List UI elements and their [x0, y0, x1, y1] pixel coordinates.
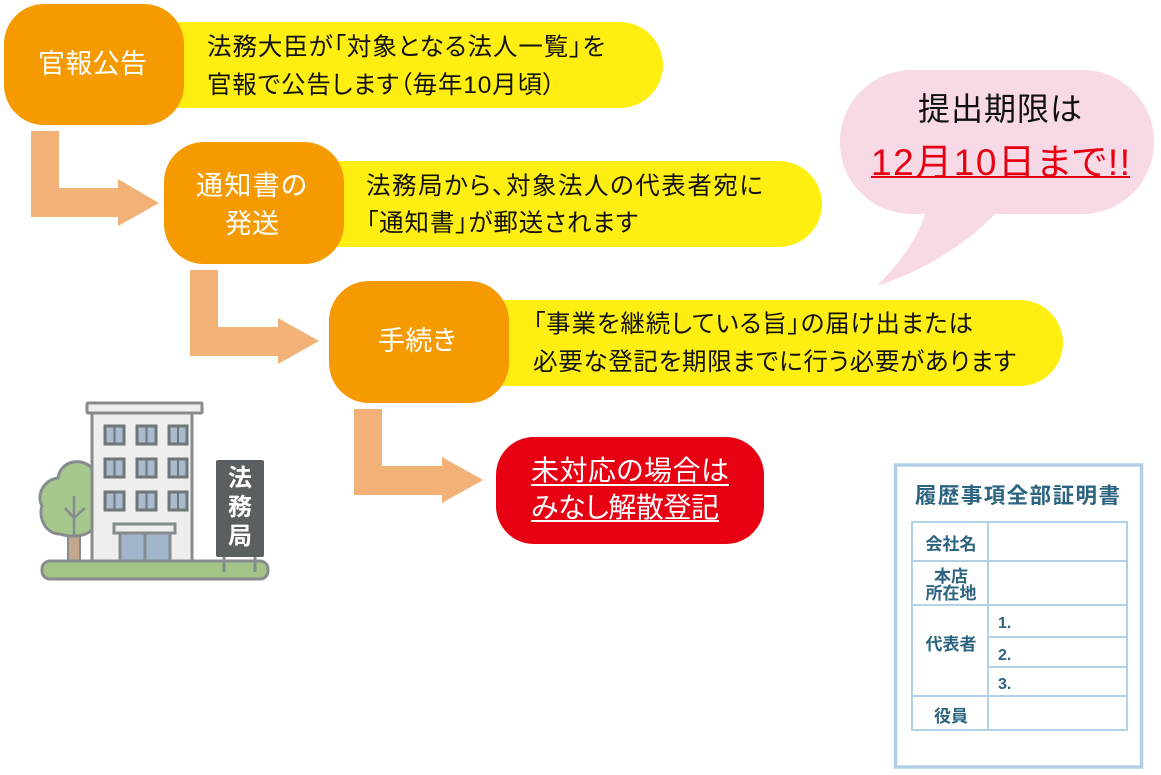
orange box: 通知書の発送: 発送 [225, 209, 279, 239]
document frame [896, 465, 1142, 767]
roof [87, 403, 202, 413]
form table: 会社名 [926, 535, 976, 554]
arrow 3 [354, 409, 483, 503]
document title: 履歴事項全部証明書 [915, 484, 1120, 508]
red box: deemed dissolution: 未対応の場合は [531, 455, 729, 486]
sign: 法務局 [216, 460, 264, 557]
yellow description bar 1: 官報で公告します（毎年10月頃） [207, 71, 555, 99]
yellow description bar 3: 「事業を継続している旨」の届け出または [533, 310, 973, 338]
yellow description bar 3 [465, 300, 1063, 386]
orange box: 通知書の発送: 通知書の [196, 171, 307, 201]
ground [42, 561, 268, 579]
orange box: 手続き [329, 281, 509, 403]
yellow description bar 2: 法務局から、対象法人の代表者宛に [366, 172, 763, 200]
icon: tree [40, 462, 92, 561]
red box: deemed dissolution: みなし解散登記 [531, 492, 719, 523]
orange box: 手続き: 手続き [378, 326, 456, 356]
form table: 1. [998, 615, 1011, 632]
step 1: official gazette notice [4, 4, 663, 125]
orange box: 官報公告 [4, 4, 184, 125]
windows [105, 426, 187, 510]
sign: 法務局: 法 [228, 465, 252, 492]
yellow description bar 2: 「通知書」が郵送されます [366, 209, 638, 237]
building body [92, 412, 192, 564]
form table: 代表者 [926, 635, 976, 654]
illustration: certificate of registered matters [896, 465, 1142, 767]
sign: 法務局: 局 [228, 523, 252, 550]
yellow description bar 3: 必要な登記を期限までに行う必要があります [533, 348, 1016, 376]
red box: deemed dissolution [496, 437, 764, 544]
yellow description bar 1: 法務大臣が「対象となる法人一覧」を [207, 33, 605, 61]
sign: 法務局: 務 [228, 494, 252, 521]
speech bubble: deadline: 提出期限は [918, 91, 1082, 127]
illustration: legal affairs bureau building [40, 403, 268, 579]
orange box: 通知書の発送 [164, 142, 344, 264]
orange box: 官報公告: 官報公告 [38, 49, 147, 79]
speech bubble: deadline [840, 70, 1154, 286]
form table [912, 522, 1127, 730]
entrance [114, 524, 175, 563]
arrow 1 [31, 131, 159, 226]
speech bubble: deadline: 12月10日まで!! [871, 142, 1130, 183]
form table: 本店 [934, 567, 968, 586]
form table: 役員 [934, 707, 968, 726]
sign posts [224, 556, 255, 572]
step 2: notice mailing [164, 142, 822, 264]
form table: 3. [998, 676, 1011, 693]
step 3: procedure [329, 281, 1063, 403]
yellow description bar 2 [300, 161, 822, 247]
form table: 2. [998, 647, 1011, 664]
yellow description bar 1 [140, 22, 663, 108]
form table: 所在地 [926, 584, 976, 603]
arrow 2 [190, 270, 319, 364]
